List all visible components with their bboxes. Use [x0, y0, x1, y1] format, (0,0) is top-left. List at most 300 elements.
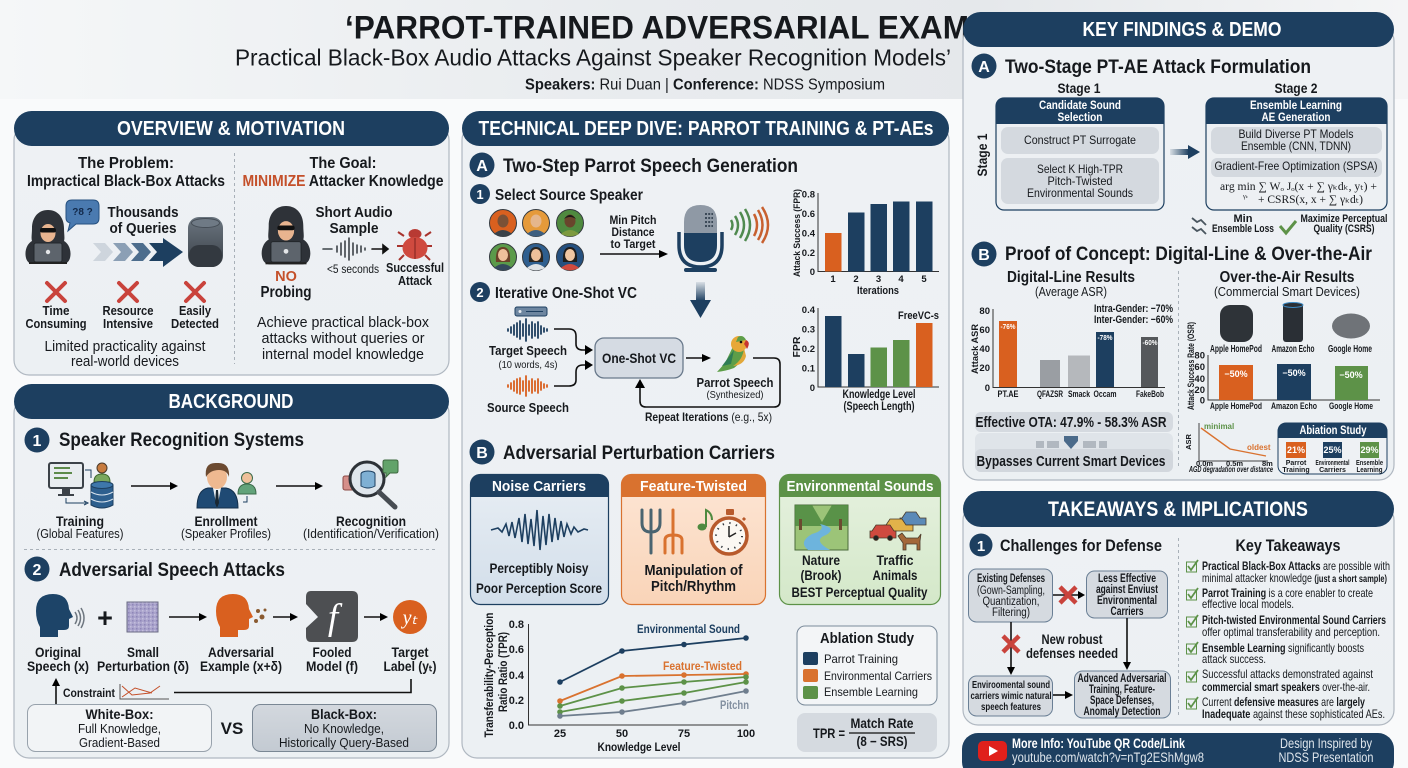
icon: recorder	[515, 307, 547, 316]
goal conclusion text: attacks without queries or	[262, 330, 424, 347]
chart: over-the-air attack success: 60	[1194, 362, 1205, 373]
short audio sample: Short Audio	[316, 204, 392, 221]
chart: over-the-air attack success: Attack Success Rate (OSR)	[1186, 322, 1196, 410]
formula	[1220, 181, 1377, 206]
chart: attack success by iterations: 0.8	[802, 190, 815, 200]
chart: attack success by iterations: Attack Success (FPR)	[792, 189, 803, 277]
chart: digital-line ASR: Attack ASR	[970, 324, 981, 374]
arrow: VC to parrot	[686, 354, 711, 362]
target speech label	[489, 343, 567, 371]
red crosses with limitations: Resource	[102, 303, 154, 318]
gender annotations	[1094, 303, 1173, 326]
training label	[36, 513, 124, 541]
chart: over-the-air attack success: −50%	[1282, 368, 1306, 378]
heading: adversarial speech attacks: Adversarial Speech Attacks	[59, 560, 285, 581]
black-box card: No Knowledge,	[304, 721, 384, 736]
axis labels: Ratio Ratio (TPR)	[498, 632, 510, 712]
axis labels: 0.8	[509, 619, 524, 631]
chart: over-the-air attack success: Amazon Echo	[1271, 401, 1317, 412]
enrollment label: (Speaker Profiles)	[181, 527, 271, 541]
chart: attack success by iterations: 0.4	[802, 228, 816, 240]
arrow: enrollment to recognition	[276, 482, 323, 490]
constraint feedback line	[52, 678, 411, 704]
takeaway 1: Practical Black-Box Attacks are possible with	[1202, 559, 1390, 573]
chart: digital-line ASR: 40	[979, 344, 990, 355]
over-the-air heading: Over-the-Air Results	[1220, 269, 1354, 286]
target speech label: (10 words, 4s)	[498, 359, 558, 371]
digital-line heading: (Average ASR)	[1035, 284, 1107, 299]
short audio sample: Sample	[330, 220, 378, 237]
device labels: Amazon Echo	[1272, 344, 1314, 355]
panel: background	[14, 384, 449, 758]
icon: music note	[698, 510, 712, 530]
chart: ASR degradation over distance	[1184, 422, 1273, 474]
chart: over-the-air attack success: Google Home	[1329, 401, 1373, 412]
axis labels: Transferability-Perception	[484, 612, 496, 738]
box: less effective: Environmental	[1097, 595, 1157, 607]
noise carrier text: Perceptibly Noisy	[490, 561, 589, 576]
axis labels: 0.6	[509, 644, 524, 656]
box: advanced defenses: Advanced Adversarial	[1078, 673, 1166, 685]
icon: adversarial head	[216, 594, 266, 637]
arrow: training to enrollment	[131, 482, 178, 490]
chart: over-the-air attack success: 20	[1194, 385, 1205, 396]
objective icons and labels	[1192, 213, 1388, 235]
TPR formula: TPR =	[813, 725, 845, 741]
parrot speech label: Parrot Speech	[696, 375, 774, 390]
thousands of queries: of Queries	[110, 221, 176, 237]
arrow: less effective down	[1123, 618, 1131, 670]
icon: perturbation noise	[127, 602, 158, 632]
panel: overview and motivation	[14, 111, 449, 375]
red crosses with limitations: Consuming	[26, 316, 87, 331]
attack step labels: Target	[392, 645, 429, 660]
box: advanced defenses	[1074, 671, 1170, 718]
arrows: speech into VC	[554, 329, 593, 386]
icon: tuning forks	[642, 510, 660, 553]
series labels: Pitchn	[720, 700, 749, 712]
heading: speaker recognition systems	[24, 428, 304, 452]
attack step labels: Example (x+δ)	[200, 659, 282, 674]
environmental labels: BEST Perceptual Quality	[792, 585, 928, 600]
objective icons and labels: Min	[1234, 213, 1253, 225]
heading A: A	[978, 59, 990, 76]
chart: ASR degradation over distance: oldest	[1247, 443, 1271, 452]
takeaway 4: attack success.	[1202, 652, 1266, 666]
series: green upper	[557, 674, 749, 709]
ablation study mini panel: 29%	[1360, 445, 1379, 455]
panel: takeaways and implications	[963, 491, 1394, 725]
heading: challenges for defense: Challenges for Defense	[1000, 537, 1162, 555]
takeaways header: TAKEAWAYS & IMPLICATIONS	[1048, 498, 1308, 521]
ablation study legend: Ensemble Learning	[824, 685, 918, 699]
chart: over-the-air attack success: Apple HomePod	[1210, 401, 1262, 412]
box: advanced defenses: Anomaly Detection	[1084, 706, 1160, 718]
ablation study mini panel: Carriers	[1319, 467, 1346, 474]
stage 1 box: Selection	[1058, 110, 1102, 124]
goal heading: The Goal:	[310, 155, 376, 172]
axis labels: 75	[678, 728, 690, 740]
red crosses with limitations	[26, 283, 219, 331]
series: green lower	[557, 679, 749, 715]
recognition label: Recognition	[336, 513, 406, 529]
chart: attack success by iterations: 3	[876, 274, 881, 285]
heading: adversarial speech attacks: 2	[33, 562, 42, 579]
plus sign: +	[97, 603, 113, 633]
card: environmental sounds: Environmental Sounds	[786, 479, 934, 495]
takeaway 2: effective local models.	[1202, 597, 1294, 611]
device labels	[1210, 344, 1372, 355]
no probing: NO	[275, 269, 297, 285]
chart: FPR by knowledge level: 0.3	[802, 324, 815, 336]
axis labels: 25	[554, 728, 566, 740]
icon: nature brook	[795, 505, 848, 550]
objective icons and labels: Quality (CSRS)	[1314, 223, 1375, 235]
chart: attack success by iterations: 0.6	[802, 209, 815, 220]
objective icons and labels: Maximize Perceptual	[1300, 213, 1388, 225]
construct surrogate step	[1001, 127, 1159, 154]
noise carrier text: Poor Perception Score	[476, 581, 602, 596]
TPR formula: (8 − SRS)	[856, 734, 908, 749]
box: less effective: Carriers	[1110, 606, 1144, 618]
icon: short waveform with arrow	[323, 238, 388, 260]
goal heading: MINIMIZE Attacker Knowledge	[242, 173, 444, 190]
icon: target waveform	[508, 319, 547, 341]
attack step labels	[27, 645, 436, 674]
chart: ASR degradation over distance: ASR	[1184, 434, 1193, 450]
check icons	[1186, 560, 1198, 709]
design credit	[1278, 736, 1374, 765]
series labels: Feature-Twisted	[663, 661, 742, 673]
icon: parrot	[717, 336, 749, 372]
header band	[0, 0, 1408, 99]
successful attack: Attack	[398, 274, 432, 288]
stage labels: Stage 1	[1058, 81, 1101, 96]
box: existing defenses: (Gown-Sampling,	[977, 585, 1045, 597]
environmental labels: Traffic	[876, 553, 914, 568]
no probing: Probing	[260, 284, 312, 301]
axis labels: 0.4	[509, 670, 525, 682]
icon: speech bubble queries: ?8 ?	[72, 207, 93, 218]
stage 2 box: Ensemble Learning	[1250, 98, 1342, 112]
recognition label: (Identification/Verification)	[303, 527, 439, 541]
digital-line heading: Digital-Line Results	[1007, 269, 1135, 286]
min pitch distance label: Distance	[612, 225, 655, 239]
chart: attack success by iterations: 0.2	[802, 248, 815, 259]
arrow: query chevrons	[93, 238, 183, 267]
box: environmental carriers mimic speech	[968, 676, 1052, 716]
card: noise carriers	[470, 474, 608, 604]
design credit: NDSS Presentation	[1278, 750, 1374, 765]
successful attack: Successful	[386, 261, 444, 275]
thousands of queries	[108, 205, 178, 237]
no probing	[260, 269, 312, 301]
chart: digital-line ASR: 0	[985, 383, 990, 394]
goal heading	[242, 155, 444, 190]
chart: digital-line ASR: 80	[979, 306, 990, 317]
step 1 heading: Select Source Speaker	[495, 187, 643, 204]
icon: youtube	[978, 741, 1007, 761]
takeaway 4	[1202, 641, 1364, 666]
optimization step: Gradient-Free Optimization (SPSA)	[1214, 159, 1378, 173]
chart: FPR by knowledge level	[791, 305, 939, 413]
step 2 heading: 2	[476, 285, 484, 300]
takeaway 5: commercial smart speakers over-the-air.	[1202, 680, 1370, 694]
chart: digital-line ASR: FakeBob	[1136, 389, 1164, 400]
training label: Training	[56, 513, 104, 529]
icon: hacker with laptop	[25, 210, 71, 264]
icon: orange fork	[665, 510, 682, 553]
ablation study mini panel: Abiation Study	[1300, 425, 1367, 437]
min pitch distance label: to Target	[610, 237, 656, 251]
build ensemble step: Ensemble (CNN, TDNN)	[1241, 139, 1351, 153]
icon: source waveform	[508, 376, 547, 396]
chart: attack success by iterations: Iterations	[857, 285, 899, 297]
TPR formula: Match Rate	[850, 716, 914, 731]
chart: ASR degradation over distance: 0.0m	[1196, 459, 1213, 468]
design credit: Design Inspired by	[1280, 736, 1372, 751]
icon: fooled model f	[306, 591, 358, 642]
card: feature-twisted: Feature-Twisted	[640, 479, 747, 495]
feature-twisted text: Pitch/Rhythm	[651, 579, 736, 595]
source speech label: Source Speech	[487, 400, 569, 415]
series labels: Environmental Sound	[637, 624, 740, 636]
axis labels: Knowledge Level	[598, 740, 680, 754]
icon: stopwatch	[711, 509, 747, 554]
chart: digital-line ASR: Occam	[1094, 389, 1116, 400]
step 2 heading	[470, 282, 637, 302]
chart: over-the-air attack success	[1186, 322, 1380, 412]
chart: over-the-air attack success: 80	[1194, 350, 1205, 362]
gender annotations: Inter-Gender: −60%	[1094, 314, 1173, 326]
chart: over-the-air attack success: 40	[1194, 374, 1205, 385]
icon: traffic and dog	[870, 512, 926, 550]
chart: TPR line chart	[484, 612, 755, 754]
heading A: A	[476, 158, 488, 175]
formula: γₖ	[1242, 194, 1249, 200]
chart: ASR degradation over distance: 8m	[1262, 459, 1273, 468]
environmental labels: Animals	[872, 568, 918, 583]
more info text: youtube.com/watch?v=nTg2EShMgw8	[1012, 750, 1204, 765]
chart: over-the-air attack success: −50%	[1339, 370, 1363, 380]
ablation study mini panel: 25%	[1323, 445, 1342, 455]
thousands of queries: Thousands	[108, 205, 178, 221]
card: noise carriers: Noise Carriers	[492, 479, 586, 495]
box: less effective	[1086, 571, 1168, 618]
chart: FPR by knowledge level: 0	[810, 383, 815, 394]
takeaway 3	[1202, 613, 1386, 639]
build ensemble step	[1211, 127, 1382, 154]
box: existing defenses: Quantization,	[982, 596, 1040, 608]
series: feature-twisted	[557, 671, 749, 704]
step 2 heading: Iterative One-Shot VC	[495, 285, 637, 302]
chart: digital-line ASR: PT.AE	[998, 389, 1018, 400]
box: less effective: Less Effective	[1098, 573, 1156, 585]
chart: attack success by iterations: 1	[830, 274, 836, 285]
white-box card	[28, 704, 212, 752]
black-box card: Historically Query-Based	[279, 735, 409, 750]
callout: bypasses devices: Bypasses Current Smart Devices	[976, 454, 1166, 470]
problem conclusion text: Limited practicality against	[44, 339, 206, 355]
box: existing defenses: Filtering)	[992, 607, 1030, 619]
select high TPR step: Environmental Sounds	[1027, 186, 1133, 200]
enrollment label	[181, 513, 271, 541]
ablation study mini panel	[1278, 423, 1387, 474]
overview header	[14, 111, 449, 146]
chart: over-the-air attack success: −50%	[1224, 369, 1248, 379]
attack step labels: Original	[35, 645, 81, 660]
background header: BACKGROUND	[168, 391, 294, 413]
icon: speech bubble queries	[66, 200, 99, 231]
chart: digital-line ASR: -76%	[1000, 322, 1016, 331]
card: feature-twisted	[622, 474, 766, 604]
icon: original speech head	[36, 594, 84, 637]
key findings header	[963, 12, 1394, 47]
card: environmental sounds	[780, 474, 940, 604]
chart: FPR by knowledge level: 0.2	[802, 344, 815, 355]
heading: speaker recognition systems: 1	[33, 433, 42, 450]
ablation study mini panel: Ensemble	[1356, 460, 1383, 467]
ablation study mini panel: Environmental	[1316, 460, 1350, 467]
overview header: OVERVIEW & MOTIVATION	[117, 118, 345, 140]
speaker avatars	[490, 210, 584, 270]
icon: microphone	[679, 205, 722, 272]
icon: target label circle	[393, 600, 427, 634]
goal conclusion text: internal model knowledge	[262, 346, 424, 363]
problem heading: The Problem:	[78, 155, 174, 172]
arrow: down to step 2	[690, 282, 711, 318]
heading: challenges for defense	[970, 534, 1162, 556]
chart: FPR by knowledge level: FreeVC-s	[898, 310, 939, 322]
select high TPR step	[1001, 158, 1159, 204]
panel: technical deep dive	[462, 111, 949, 758]
icon: sound waves	[731, 207, 768, 243]
attack step labels: Model (f)	[306, 659, 358, 674]
ablation study mini panel: Training	[1282, 467, 1310, 474]
recognition label	[303, 513, 439, 541]
more info text	[1012, 736, 1204, 765]
stage 2 box	[1206, 98, 1387, 210]
series: environmental sound	[557, 635, 749, 685]
black-box card: Black-Box:	[311, 706, 377, 722]
stage 1 box: Candidate Sound	[1039, 98, 1121, 112]
chart: digital-line ASR: QFAZSR	[1037, 389, 1063, 400]
callout: effective OTA: Effective OTA: 47.9% - 58.3% ASR	[976, 415, 1167, 431]
icon: amazon echo	[1283, 302, 1303, 342]
takeaway 1: minimal attacker knowledge (just a short sample)	[1202, 571, 1387, 585]
formula: arg min ∑ Wₒ Jₒ(x + ∑ γₖdₖ, yₜ) +	[1220, 181, 1377, 193]
attack step labels: Label (yₜ)	[384, 659, 436, 674]
chart: attack success by iterations: 0	[810, 267, 815, 278]
red crosses with limitations: Detected	[171, 316, 219, 331]
enrollment label: Enrollment	[194, 513, 258, 529]
box: advanced defenses: Training, Feature-	[1089, 684, 1155, 696]
white-box card: Gradient-Based	[79, 735, 160, 750]
technical header: TECHNICAL DEEP DIVE: PARROT TRAINING & PT-AEs	[478, 118, 934, 140]
stage labels: Stage 2	[1274, 81, 1318, 96]
technical header	[462, 111, 949, 146]
build ensemble step: Build Diverse PT Models	[1238, 127, 1354, 141]
red crosses with limitations: Easily	[179, 303, 212, 318]
arrow: to target label	[364, 613, 388, 621]
black-box card	[252, 704, 436, 752]
series labels	[637, 624, 749, 712]
heading A: Two-Stage PT-AE Attack Formulation	[1005, 56, 1311, 78]
box: existing defenses	[968, 569, 1052, 622]
arrow: stage 1 to stage 2	[1170, 145, 1200, 159]
icon: apple homepod	[1220, 305, 1253, 342]
box: environmental carriers mimic speech: speech features	[981, 701, 1041, 713]
takeaway 2	[1202, 586, 1373, 611]
constraint feedback line: Constraint	[63, 688, 115, 700]
five seconds label: <5 seconds	[327, 264, 379, 276]
heading A: Two-Step Parrot Speech Generation	[503, 155, 798, 177]
attack step labels: Fooled	[312, 645, 352, 660]
heading: challenges for defense: 1	[977, 538, 985, 555]
white-box card: Full Knowledge,	[78, 721, 161, 736]
device labels: Apple HomePod	[1210, 344, 1262, 355]
parrot speech label: (Synthesized)	[706, 389, 764, 401]
new robust defenses needed: defenses needed	[1026, 645, 1118, 661]
icon: google home	[1332, 314, 1370, 338]
icon: fooled model f: f	[328, 597, 343, 638]
TPR formula	[797, 713, 937, 752]
one-shot VC box: One-Shot VC	[602, 350, 676, 366]
main title: ‘PARROT-TRAINED ADVERSARIAL EXAMPLES:	[345, 10, 1062, 46]
icon: training	[49, 463, 113, 508]
arrow: to fooled model	[273, 613, 298, 621]
chart: digital-line ASR: Smack	[1068, 389, 1091, 400]
chart: FPR by knowledge level: FPR	[791, 336, 803, 358]
chart: over-the-air attack success: 0	[1200, 396, 1205, 406]
chart: FPR by knowledge level: Knowledge Level	[842, 389, 916, 401]
goal conclusion text	[257, 314, 429, 363]
select high TPR step: Pitch-Twisted	[1048, 174, 1112, 188]
noise waveform	[491, 510, 588, 550]
attack step labels: Speech (x)	[27, 659, 89, 674]
ablation study legend: Ablation Study	[820, 630, 915, 647]
target speech label: Target Speech	[489, 343, 567, 358]
heading B: Proof of Concept: Digital-Line & Over-the-Air	[1005, 243, 1372, 265]
arrow: to advanced defenses	[1053, 691, 1073, 699]
gender annotations: Intra-Gender: −70%	[1094, 303, 1173, 315]
objective icons and labels: Ensemble Loss	[1212, 223, 1274, 235]
chart: attack success by iterations	[792, 189, 939, 297]
new robust defenses needed: New robust	[1042, 631, 1103, 647]
arrow: blocked down	[1003, 622, 1019, 675]
axis labels: 100	[737, 728, 755, 740]
formula: + CSRS(x, x + ∑ γₖdₜ)	[1258, 194, 1363, 206]
attack step labels: Small	[127, 645, 159, 660]
problem heading: Impractical Black-Box Attacks	[27, 173, 225, 190]
background header	[14, 384, 449, 419]
icon: target label circle: yₜ	[401, 607, 418, 629]
icon: recognition magnifier	[343, 460, 398, 507]
over-the-air heading	[1214, 269, 1360, 299]
feature-twisted text: Manipulation of	[644, 563, 743, 579]
takeaway 1	[1202, 559, 1390, 585]
axis labels: 50	[616, 728, 628, 740]
chart: digital-line ASR: 20	[979, 363, 990, 374]
chart: FPR by knowledge level: 0.4	[802, 305, 816, 316]
chart: ASR degradation over distance: minimal	[1204, 422, 1234, 431]
attack step labels: Adversarial	[208, 645, 274, 660]
over-the-air heading: (Commercial Smart Devices)	[1214, 284, 1360, 299]
successful attack	[386, 261, 444, 288]
versus label: VS	[221, 719, 243, 738]
box: existing defenses: Existing Defenses	[977, 573, 1045, 585]
training label: (Global Features)	[36, 527, 124, 541]
